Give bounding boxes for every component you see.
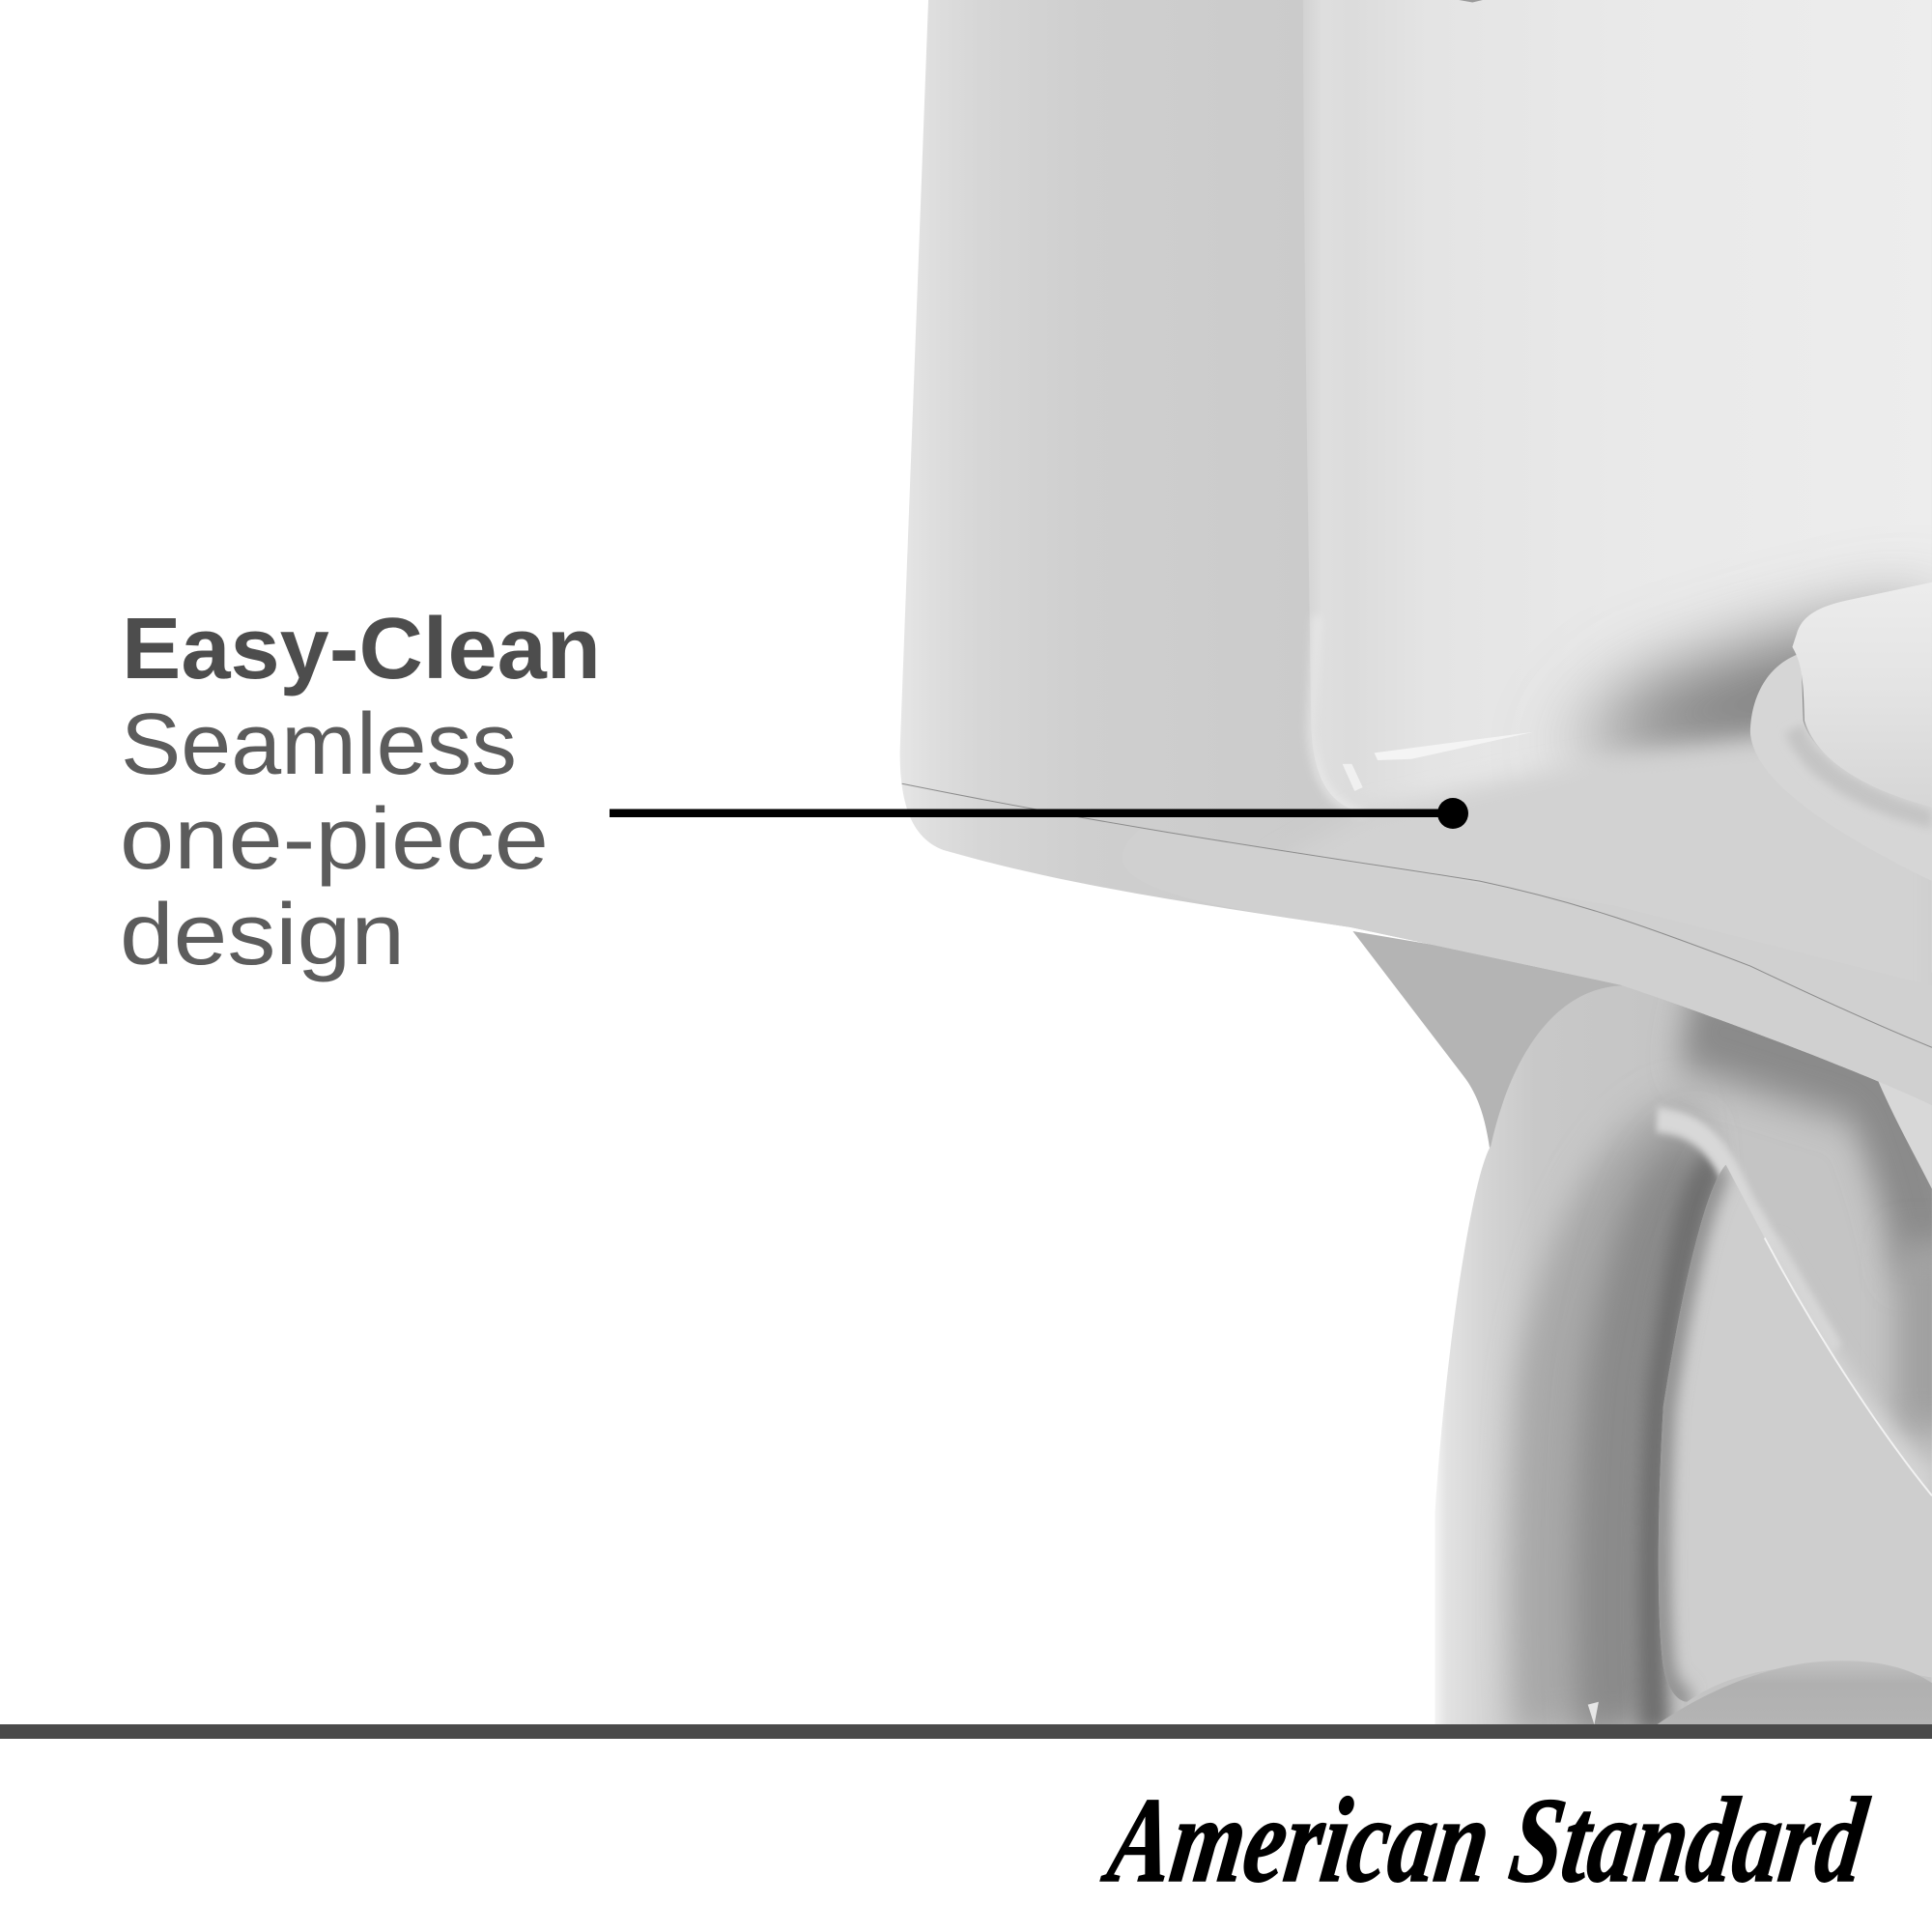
footer divider bar [0,1724,1932,1739]
seat hinge ring [1750,653,1932,881]
tank top notch [1459,0,1483,3]
toilet deck [1356,725,1915,1082]
toilet pedestal and trapway [1352,931,1932,1732]
toilet photo illustration [869,0,1932,1732]
tank side face [869,0,1932,1109]
recessed side panel [1658,1165,1932,1702]
heading: Easy-Clean: Easy-Clean [122,601,601,697]
callout leader line with dot [610,798,1468,829]
side face fade [1311,616,1364,813]
description line 3: design [120,887,405,983]
panel white edge highlight [1765,1237,1932,1495]
description line 2: one-piece [120,791,549,888]
small glints [1588,1702,1599,1724]
seat cover [1792,582,1932,808]
glossy streak [1375,732,1533,760]
callout heading and description [120,601,601,983]
shadowed base wedge under lip [1352,931,1627,1156]
description line 1: Seamless [121,696,517,793]
toilet tank and lip [869,0,1932,1109]
seam line [902,783,1932,1047]
bowl side behind trapway [1877,1078,1932,1189]
tank front face [1303,0,1932,875]
corner speckle [1343,764,1363,791]
floor hump [1657,1661,1932,1724]
shadow below tank front [1568,604,1932,757]
trapway tube with shading [1429,972,1932,1732]
lip lower side [1122,829,1932,1105]
